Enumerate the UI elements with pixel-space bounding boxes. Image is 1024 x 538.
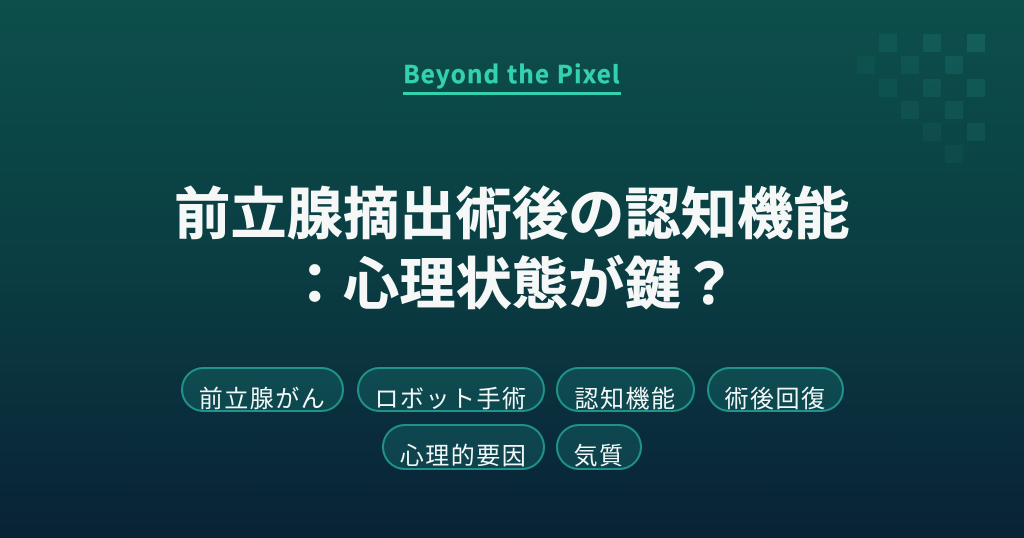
tag: cognitive function [556,367,695,412]
tag: temperament [556,424,642,470]
tag: prostate cancer: 前立腺がん [199,379,326,414]
brand label with underline: Beyond the Pixel [403,55,621,90]
tag group [181,367,844,471]
tag: post-op recovery [707,367,844,412]
tag: cognitive function: 認知機能 [574,379,676,414]
tag: prostate cancer [181,367,344,412]
tag: psychological factors: 心理的要因 [400,436,527,471]
title [174,170,850,321]
tag: temperament: 気質 [574,436,624,471]
tag: post-op recovery: 術後回復 [724,379,826,414]
tag: psychological factors [382,424,545,470]
decorative pixel grid [879,34,985,141]
title line 2: ：心理状態が鍵？ [287,240,737,321]
title line 1: 前立腺摘出術後の認知機能 [174,170,850,251]
tag: robotic surgery: ロボット手術 [374,379,528,414]
tag: robotic surgery [357,367,545,412]
